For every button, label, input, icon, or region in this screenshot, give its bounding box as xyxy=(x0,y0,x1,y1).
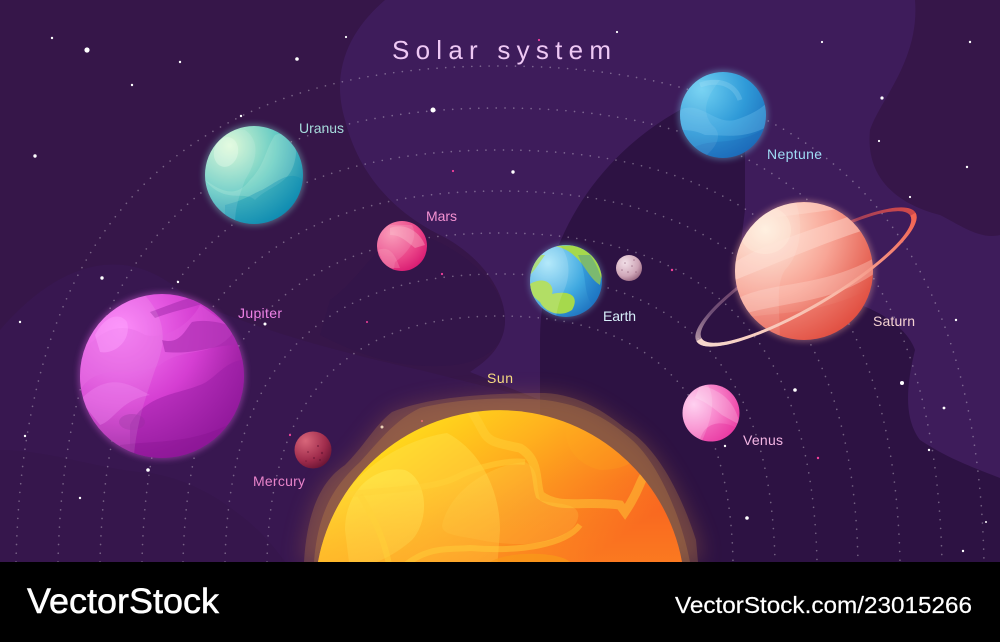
watermark bar: VectorStock xyxy=(27,582,220,621)
watermark bar xyxy=(0,562,1000,642)
label: Venus: Venus xyxy=(743,432,783,448)
moon xyxy=(616,255,642,281)
planet: Earth xyxy=(528,244,604,320)
planet: Saturn xyxy=(695,197,917,347)
sun xyxy=(300,393,702,570)
planet: Venus xyxy=(682,384,740,445)
label: Earth: Earth xyxy=(603,308,636,324)
planet: Mars xyxy=(377,221,427,275)
label: Uranus: Uranus xyxy=(299,120,344,136)
label: Saturn: Saturn xyxy=(873,313,915,329)
planet: Uranus xyxy=(203,124,305,230)
planet: Jupiter xyxy=(70,290,246,470)
label: Neptune: Neptune xyxy=(767,146,822,162)
orbit paths xyxy=(16,66,984,562)
label: Jupiter: Jupiter xyxy=(238,305,282,321)
title: Solar system xyxy=(392,35,611,65)
watermark bar: VectorStock.com/23015266 xyxy=(675,592,972,618)
label: Mercury: Mercury xyxy=(253,473,305,489)
planet: Neptune xyxy=(678,70,770,160)
label: Mars: Mars xyxy=(426,208,457,224)
planet: Mercury xyxy=(294,432,332,468)
label: Sun: Sun xyxy=(487,370,513,386)
stars xyxy=(19,31,987,552)
